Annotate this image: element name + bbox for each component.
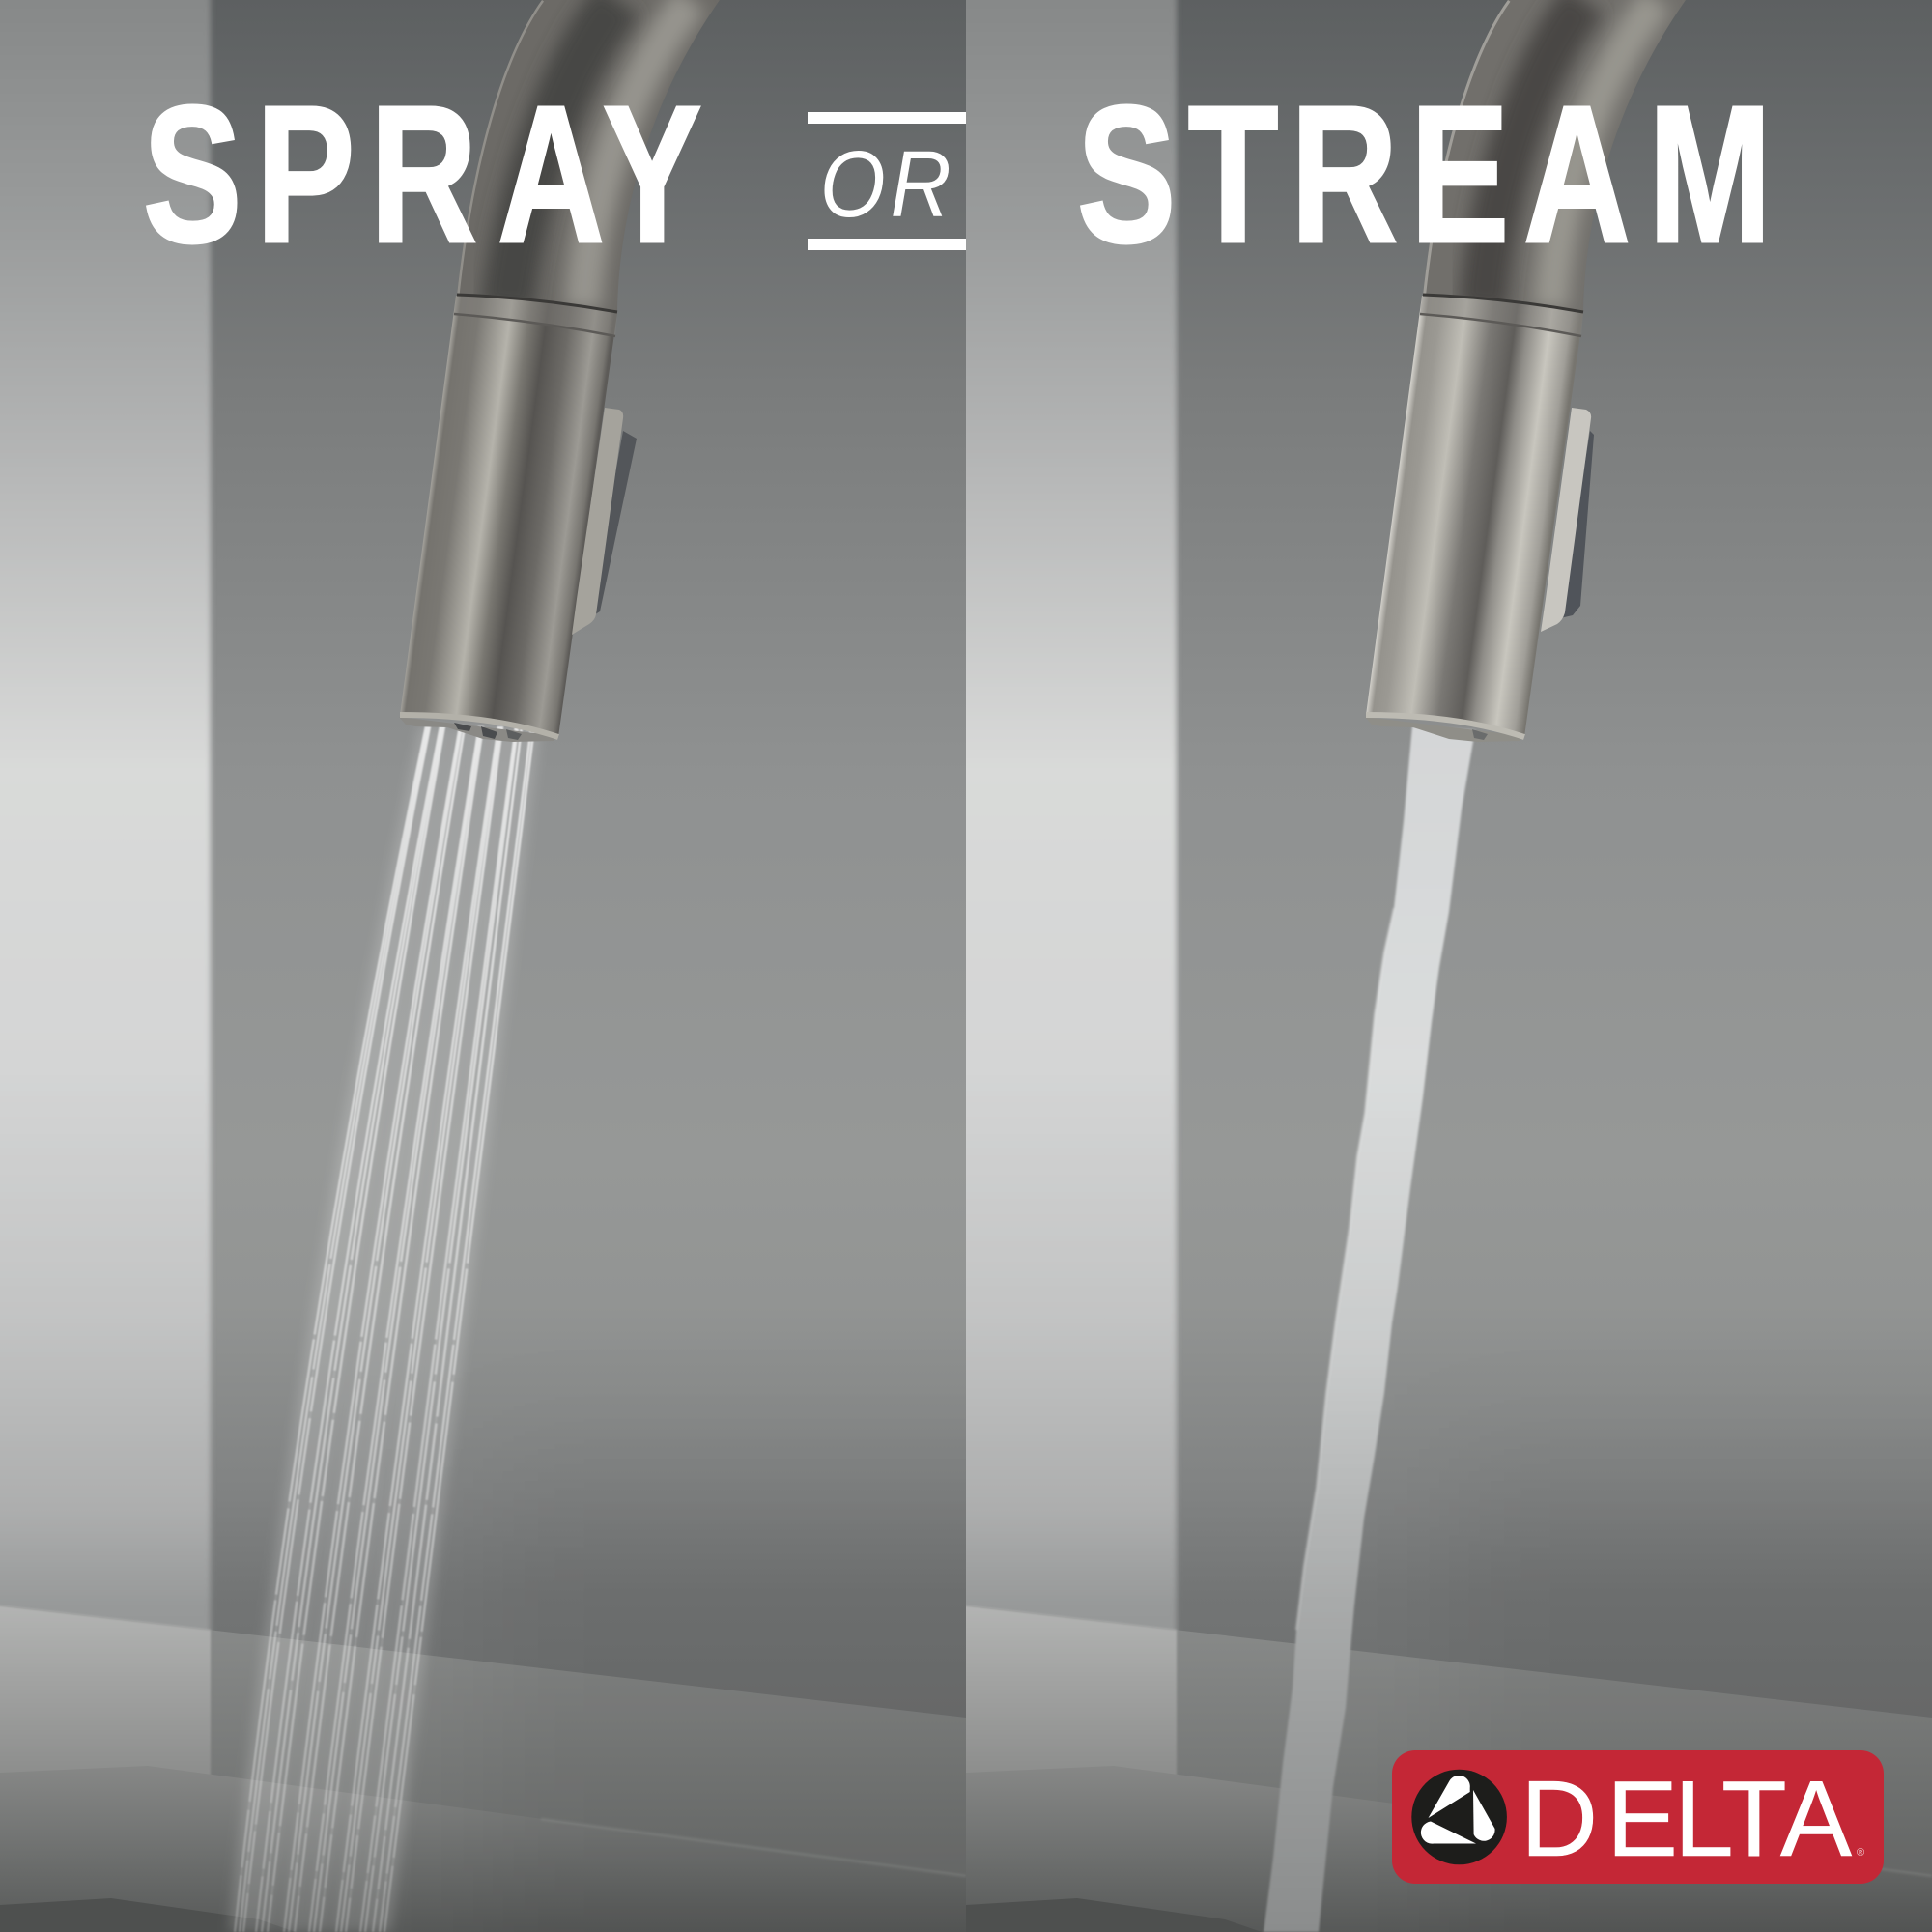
panel: spray — [0, 0, 966, 1932]
heading: STREAM: STREAM — [1077, 67, 1772, 284]
logo background — [1392, 1750, 1884, 1884]
word OR with rules: OR — [820, 131, 952, 237]
head toggle button — [572, 408, 637, 635]
registered mark: ® — [1857, 1847, 1864, 1859]
head toggle button — [1541, 408, 1594, 632]
logo wordmark: DELTA — [1520, 1759, 1852, 1879]
word OR with rules — [808, 112, 966, 250]
heading: SPRAY: SPRAY — [143, 67, 701, 284]
faucet spout — [1423, 0, 1686, 313]
panel: stream — [947, 0, 1932, 1932]
stream of water — [1264, 726, 1475, 1932]
faucet spout — [457, 0, 720, 313]
logo emblem — [1411, 1770, 1507, 1864]
faucet pull-down head — [1365, 295, 1583, 742]
spray water jets — [235, 726, 534, 1932]
spray nozzle face — [399, 717, 558, 742]
panel background: wall, backsplash and sink — [0, 0, 966, 1932]
logo: Delta badge — [1392, 1750, 1884, 1884]
panel background: wall, backsplash and sink — [947, 0, 1932, 1932]
faucet pull-down head — [399, 295, 617, 742]
stream nozzle face — [1410, 724, 1488, 742]
